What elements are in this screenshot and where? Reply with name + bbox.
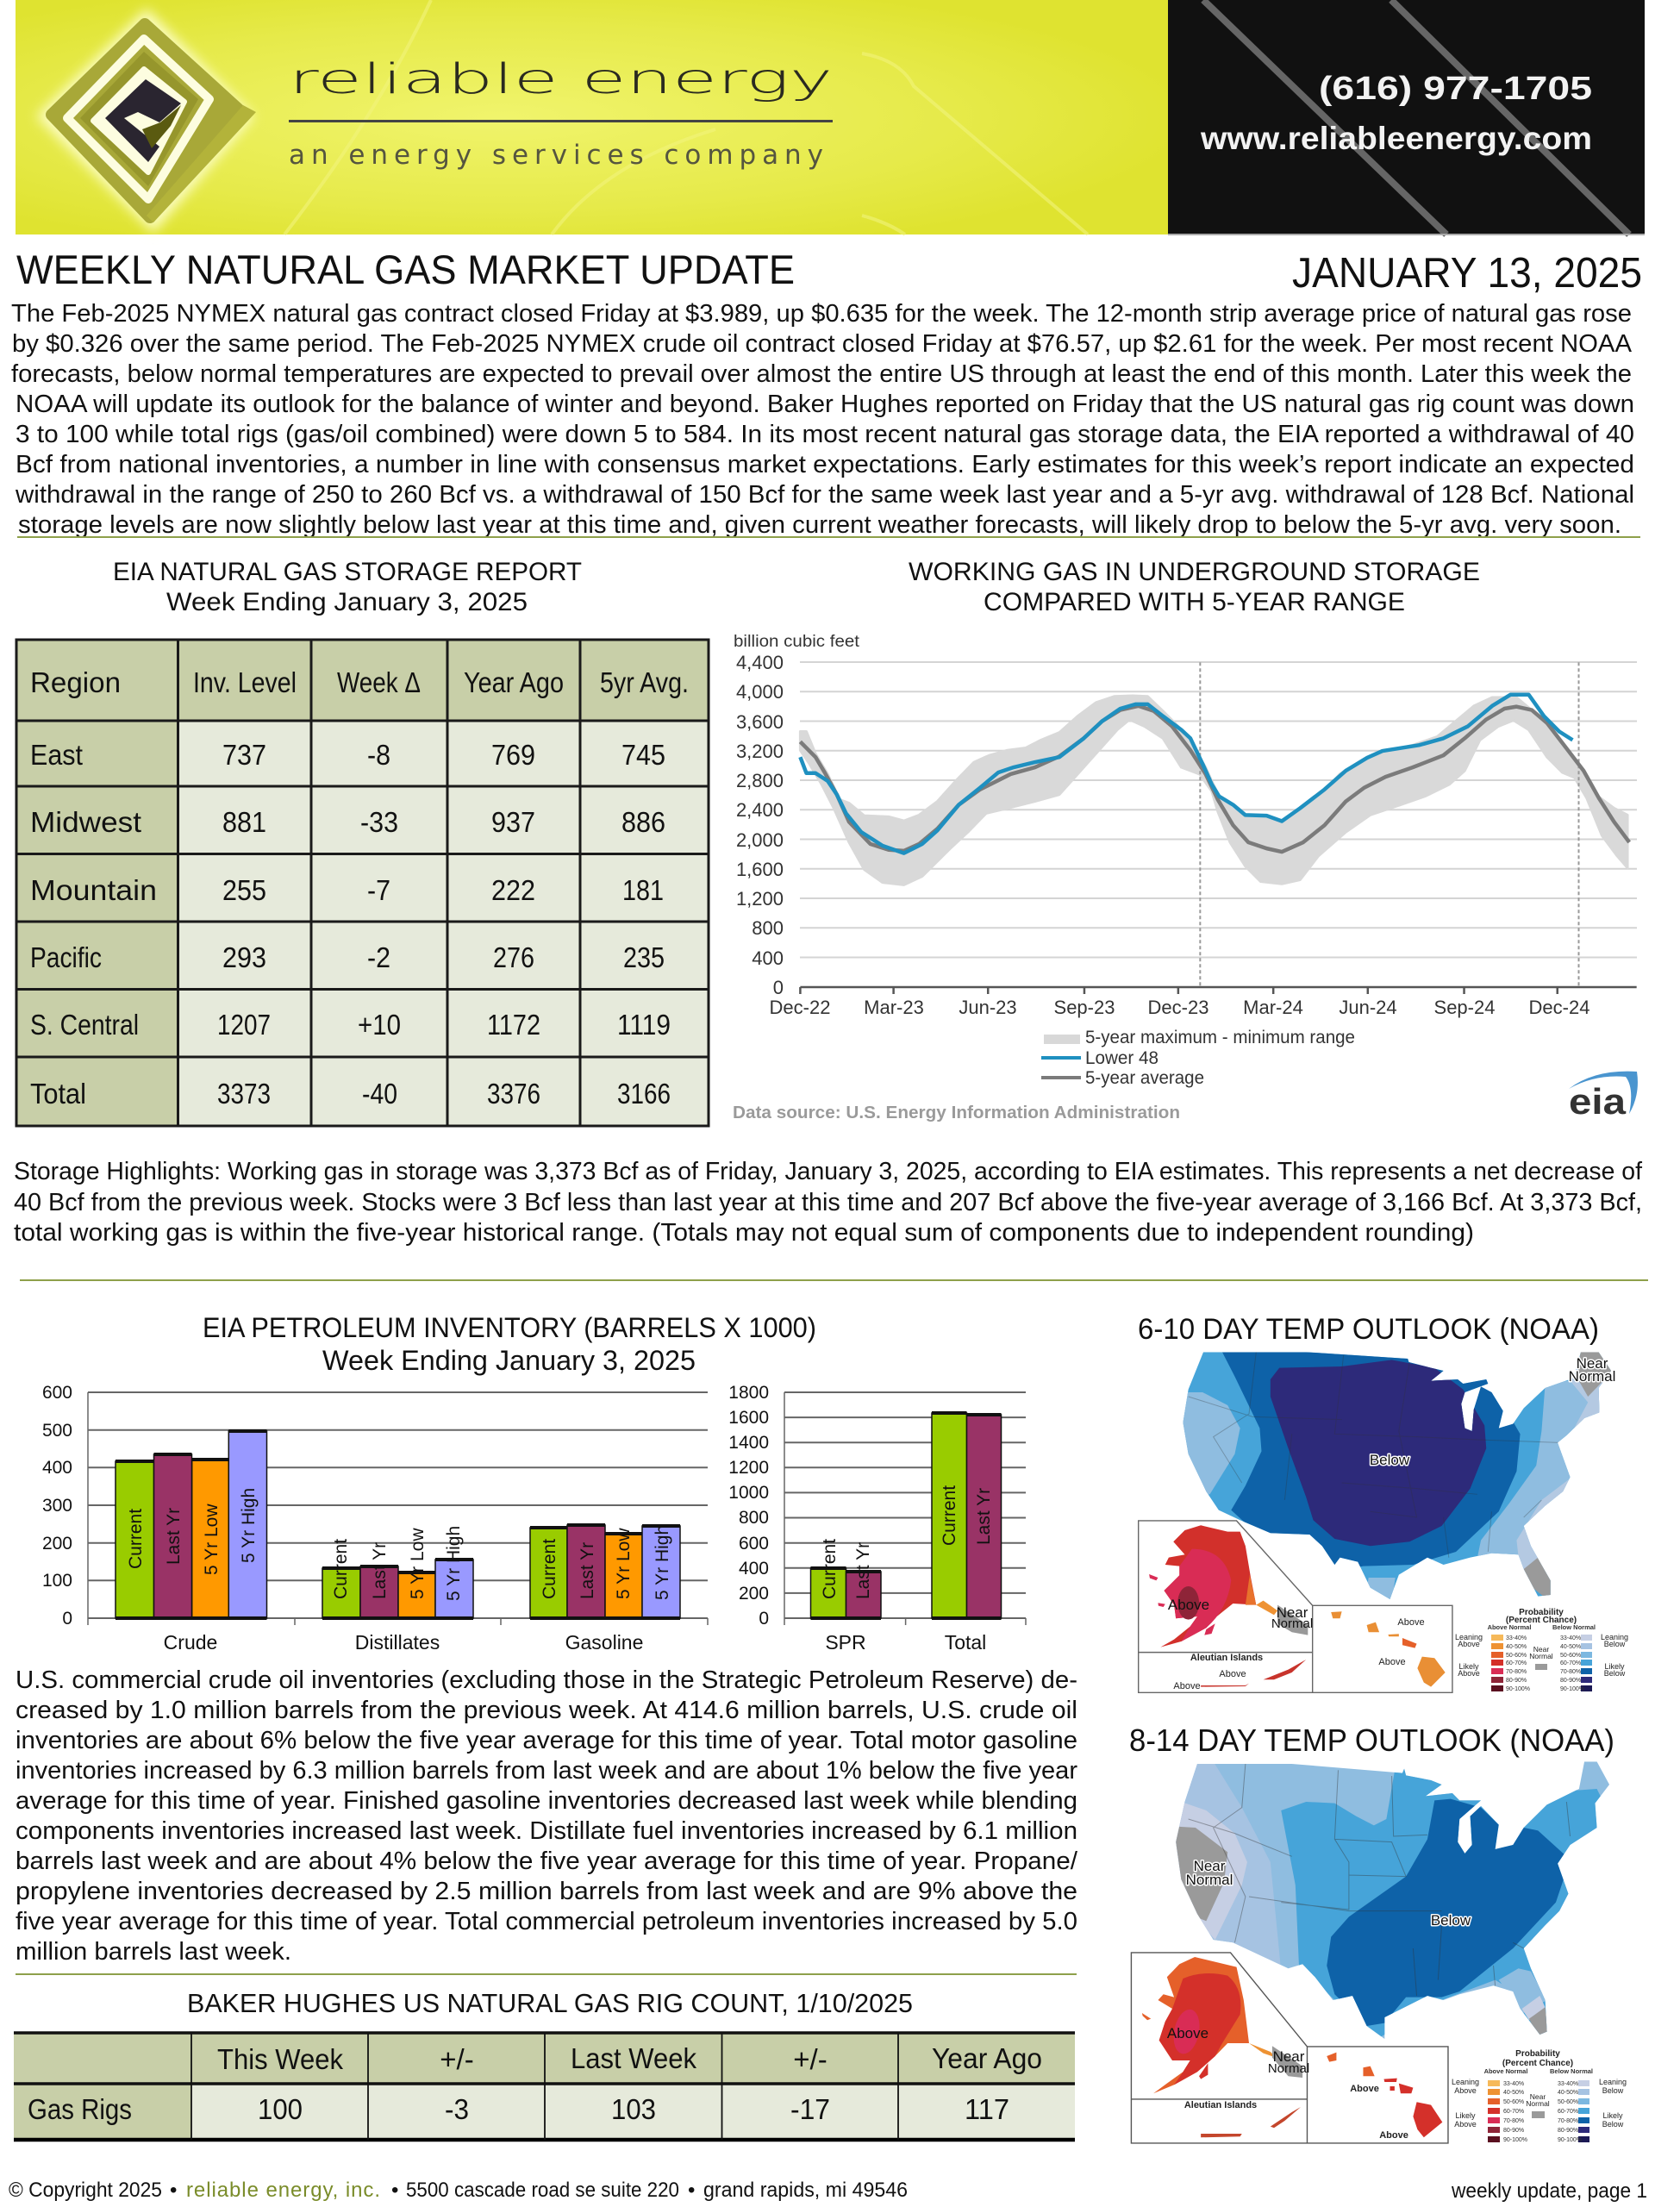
storage table [16,640,709,1126]
x axis labels: Mar-24 [1243,997,1303,1018]
petroleum inventory text: inventories are about 6% below the five year average for this time of year. Total motor gasoline [16,1727,1077,1754]
heading: storage report: EIA NATURAL GAS STORAGE REPORT [113,558,582,586]
rig table header [217,2042,1042,2075]
row: East [30,739,665,771]
rig table header: Last Week [571,2042,696,2074]
map legend: 50-60% [1503,2099,1524,2105]
chart unit label: billion cubic feet [734,633,860,651]
map legend: 70-80% [1503,2118,1524,2124]
map legend: 80-90% [1506,1678,1527,1684]
map legend: 33-40% [1558,2081,1578,2087]
heading: petroleum inventory: EIA PETROLEUM INVENTORY (BARRELS X 1000) [203,1312,816,1343]
map labels: Normal [1186,1872,1233,1888]
row: S. Central: 1172 [487,1009,540,1041]
bar labels: Current [540,1539,559,1599]
banner: yellow logo panel [16,0,1168,234]
bar labels: 5 Yr Low [408,1528,428,1599]
row: East: 737 [222,739,266,771]
storage highlights text: total working gas is within the five-year historical range. (Totals may not equal sum of components due to independent rounding) [14,1219,1474,1247]
map legend: Leaning [1601,1633,1628,1641]
map legend [1455,1608,1628,1692]
chart legend: 5-year average [1085,1068,1204,1088]
logo rule [289,120,833,122]
table header row: Year Ago [464,666,564,698]
y axis labels: 400 [739,1559,769,1579]
y axis labels: 1600 [728,1408,769,1428]
gasoline bars [530,1525,680,1618]
footer: company address: • [391,2179,398,2202]
petroleum bar chart: crude, distillates, gasoline [42,1383,708,1654]
map: 6-10 day temperature outlook [1139,1342,1628,1692]
Alaska inset frames [1139,1521,1452,1692]
table header row: Region [30,666,121,698]
footer: company address: 5500 cascade road se suite 220 [406,2179,679,2202]
row: Midwest: 881 [222,806,266,838]
x axis labels: Sep-24 [1434,997,1495,1018]
y axis labels: 0 [759,1609,769,1629]
map labels: Above [1350,2084,1379,2094]
map legend: Likely [1604,1662,1625,1671]
row: S. Central: 1207 [217,1009,271,1041]
map labels [1168,1355,1615,1691]
chart legend [1041,1028,1355,1088]
x axis labels: Jun-24 [1339,997,1397,1018]
footer: company address [9,2179,908,2202]
y axis labels: 3,600 [736,711,784,733]
footer: company address: grand rapids, mi 49546 [703,2179,908,2202]
Hawaii [1331,1611,1446,1687]
map legend: 40-50% [1558,2090,1578,2096]
petroleum inventory text: barrels last week and are about 4% below the five year average for this time of year. Propane/ [16,1848,1078,1875]
x axis [800,987,1637,994]
rig table values: Gas Rigs [28,2093,132,2125]
map legend: Near [1530,2092,1546,2101]
Alaska [1149,1525,1308,1647]
map legend: 33-40% [1503,2081,1524,2087]
petroleum inventory text [16,1666,1078,1966]
map legend: Above [1454,2120,1477,2129]
map legend: 40-50% [1503,2090,1524,2096]
y axis labels: 800 [739,1508,769,1528]
petroleum inventory text: U.S. commercial crude oil inventories (excluding those in the Strategic Petroleum Reserve) de- [16,1666,1077,1694]
row: Mountain: -7 [367,874,390,906]
SPR bars [810,1568,881,1618]
rig table values: 100 [258,2093,303,2125]
logo tagline: an energy services company [289,140,823,171]
map legend: 80-90% [1560,1678,1581,1684]
map labels: Above [1167,2025,1208,2041]
y axis labels: 1400 [728,1433,769,1453]
y axis labels: 800 [752,917,784,939]
rig table values: -17 [790,2093,830,2125]
row: Pacific [30,941,665,973]
row: East: 769 [491,739,535,771]
bar labels: Last Yr [164,1508,184,1565]
storage highlights text: Storage Highlights: Working gas in storage was 3,373 Bcf as of Friday, January 3, 2025, according to EIA estimates. This represents a net decrease of [14,1158,1643,1185]
x axis labels: Jun-23 [959,997,1017,1018]
map legend: Below Normal [1552,1623,1596,1631]
5-year average line [800,706,1629,852]
title: WEEKLY NATURAL GAS MARKET UPDATE [16,247,795,292]
map legend: (Percent Chance) [1506,1616,1577,1625]
row: Midwest: -33 [360,806,398,838]
footer: company address: © Copyright 2025 [9,2179,162,2202]
row: Midwest [30,806,665,838]
map legend: Above [1454,2086,1477,2095]
map legend: Above [1458,1640,1480,1648]
heading: storage report [113,558,582,616]
market summary text: Bcf from national inventories, a number in line with consensus market expectations. Early estimates for this week’s report indicate an expected [16,451,1634,478]
row: East: -8 [367,739,390,771]
row: Mountain: 255 [222,874,266,906]
heading: petroleum inventory: Week Ending January 3, 2025 [322,1345,696,1376]
map legend: 50-60% [1558,2099,1578,2105]
y axis labels: 1,600 [736,859,784,880]
row: Midwest: Midwest [30,806,141,838]
table header row: Inv. Level [193,666,297,698]
category labels: SPR [825,1631,866,1654]
table header row: 5yr Avg. [600,666,689,698]
date: JANUARY 13, 2025 [1292,250,1642,297]
row: S. Central: 1119 [617,1009,671,1041]
bar labels: Current [126,1509,146,1569]
map labels: Near [1577,1355,1608,1372]
map legend: Above Normal [1484,2067,1527,2075]
x axis labels: Mar-23 [864,997,924,1018]
market summary text: storage levels are now slightly below last year at this time and, given current weather forecasts, will likely drop to below the 5-yr avg. very soon. [18,511,1621,539]
category labels: Gasoline [565,1631,643,1654]
bar labels: Last Yr [853,1542,873,1599]
map legend: Likely [1602,2111,1623,2120]
row: Mountain: 222 [491,874,535,906]
y axis labels [736,652,784,998]
map labels: Near [1277,1604,1308,1621]
map legend: 80-90% [1503,2128,1524,2134]
heading: rig count: BAKER HUGHES US NATURAL GAS RIG COUNT, 1/10/2025 [187,1988,913,2018]
bar labels: Current [820,1539,840,1599]
y axis labels: 2,000 [736,829,784,851]
map legend: 60-70% [1506,1660,1527,1666]
map labels: Normal [1268,2061,1309,2076]
map labels: Above [1219,1669,1246,1679]
x axis labels [770,997,1589,1018]
bar labels: Last Yr [974,1488,994,1545]
row: Total: Total [30,1078,86,1110]
heading: 6-10 day outlook: 6-10 DAY TEMP OUTLOOK (NOAA) [1138,1313,1599,1346]
heading: working gas chart: COMPARED WITH 5-YEAR RANGE [984,588,1405,616]
map legend: 90-100% [1506,1686,1530,1692]
map labels: Aleutian Islands [1190,1653,1263,1663]
bar labels: Last Yr [370,1542,390,1599]
map legend: 60-70% [1558,2109,1578,2115]
market summary text: NOAA will update its outlook for the balance of winter and beyond. Baker Hughes reported on Friday that the US natural gas rig count was down [16,391,1634,418]
map legend: Below [1602,2120,1624,2129]
category labels [825,1631,986,1654]
map legend: 50-60% [1506,1653,1527,1659]
bar labels: Current [331,1539,351,1599]
map legend: (Percent Chance) [1502,2059,1573,2068]
petroleum inventory text: creased by 1.0 million barrels from the previous week. At 414.6 million barrels, U.S. crude oil [16,1697,1077,1724]
category labels: Total [945,1631,986,1654]
map labels: Near [1273,2048,1305,2065]
y axis labels: 300 [42,1496,72,1516]
dashed year markers [1200,662,1578,987]
map labels: Above [1379,2130,1408,2141]
map: 8-14 day temperature outlook [1131,1756,1627,2143]
map legend: Probability [1515,2049,1560,2059]
petroleum inventory text: million barrels last week. [16,1938,291,1966]
map labels: Above [1378,1657,1406,1667]
map legend: 33-40% [1506,1635,1527,1641]
row: Mountain: Mountain [30,874,157,906]
market summary text: forecasts, below normal temperatures are expected to prevail over almost the entire US through at least the end of this month. Later this week the [11,360,1632,388]
row: Pacific: 293 [222,941,266,973]
rig table header: +/- [440,2043,474,2075]
row: Mountain: 181 [622,874,664,906]
bar labels: 5 Yr High [653,1525,672,1600]
row: S. Central: +10 [358,1009,401,1041]
x axis labels: Sep-23 [1054,997,1115,1018]
map legend: 50-60% [1560,1653,1581,1659]
y axis labels: 4,400 [736,652,784,673]
heading: working gas chart [909,558,1480,616]
map labels: Below [1431,1912,1471,1929]
storage highlights text [14,1158,1643,1247]
map legend: 90-100% [1558,2137,1582,2143]
heading: storage report: Week Ending January 3, 2025 [166,588,528,616]
petroleum inventory text: propylene inventories decreased by 2.5 million barrels from last week and are 9% above the [16,1878,1077,1905]
y axis labels: 200 [42,1534,72,1554]
row: Total: -40 [362,1078,397,1110]
y axis labels: 100 [42,1571,72,1591]
y axis labels: 4,000 [736,681,784,703]
map legend: 60-70% [1503,2109,1524,2115]
bar labels: 5 Yr High [444,1526,464,1601]
table header row [30,666,689,698]
map labels: Above [1397,1617,1425,1628]
map legend: Leaning [1599,2078,1627,2086]
chart legend: 5-year maximum - minimum range [1085,1028,1355,1047]
map legend: 90-100% [1503,2137,1527,2143]
market summary text: by $0.326 over the same period. The Feb-2025 NYMEX crude oil contract closed Friday at $76.57, up $2.61 for the week. Per most recent NOAA [12,330,1633,358]
market summary text [11,300,1634,539]
map legend: 70-80% [1558,2118,1578,2124]
map legend: 33-40% [1560,1635,1581,1641]
heading: 8-14 day outlook: 8-14 DAY TEMP OUTLOOK (NOAA) [1129,1722,1614,1758]
heading: working gas chart: WORKING GAS IN UNDERGROUND STORAGE [909,558,1480,586]
map labels: Above [1173,1681,1201,1691]
y axis labels: 2,800 [736,770,784,791]
rig table values: 103 [611,2093,656,2125]
map legend: Above Normal [1488,1623,1531,1631]
y axis labels: 1,200 [736,888,784,910]
y axis labels: 1200 [728,1458,769,1478]
rig table values: -3 [445,2093,469,2125]
y axis labels: 1000 [728,1483,769,1503]
category labels [164,1631,643,1654]
row: Pacific: Pacific [30,941,102,973]
map legend: 70-80% [1506,1669,1527,1675]
crude bars [116,1431,267,1618]
rig count table [14,2033,1075,2140]
banner light streaks [284,0,1088,234]
rig table header: +/- [793,2043,828,2075]
row: Total: 3373 [217,1078,271,1110]
row: Pacific: 235 [623,941,665,973]
chart legend: Lower 48 [1085,1048,1159,1068]
row: Total [30,1078,671,1110]
x axis labels: Dec-23 [1148,997,1208,1018]
row: East: 745 [621,739,665,771]
row: Total: 3376 [487,1078,540,1110]
map labels: Normal [1271,1616,1313,1631]
logo: diamond mark [36,9,256,233]
Aleutian islands [1201,2107,1301,2137]
working gas line chart [733,633,1638,1122]
Alaska inset frames [1131,1953,1448,2143]
bar labels: 5 Yr High [239,1488,259,1563]
footer: company address: • [688,2179,695,2202]
bar labels [126,1488,672,1601]
map labels: Aleutian Islands [1184,2100,1257,2110]
icon: eia logo [1569,1072,1638,1122]
Hawaii [1327,2053,1375,2076]
map legend: Normal [1526,2099,1550,2108]
category labels: Distillates [355,1631,440,1654]
logo wordmark: reliable energy [289,55,833,103]
x axis labels: Dec-24 [1529,997,1589,1018]
row: S. Central: S. Central [30,1009,139,1041]
bar labels: 5 Yr Low [614,1528,634,1599]
y axis labels: 200 [739,1584,769,1604]
map legend: Above [1458,1669,1480,1678]
5-year range band [800,696,1627,885]
data source note: Data source: U.S. Energy Information Administration [733,1104,1180,1122]
petroleum inventory text: five year average for this time of year. Total commercial petroleum inventories increased by 5.0 [16,1908,1077,1935]
map legend: 60-70% [1560,1660,1581,1666]
map legend: Leaning [1452,2078,1479,2086]
bar labels: 5 Yr Low [202,1504,222,1575]
map labels: Above [1168,1597,1209,1613]
row: Midwest: 886 [621,806,665,838]
map legend: Near [1533,1645,1549,1654]
Lower 48 line [800,695,1572,853]
map legend: Below Normal [1550,2067,1593,2075]
website: www.reliableenergy.com [1200,121,1592,156]
market summary text: withdrawal in the range of 250 to 260 Bcf vs. a withdrawal of 150 Bcf for the same week last year and a 5-yr avg. withdrawal of 128 Bcf. National [15,481,1634,509]
footer: company address: reliable energy, inc. [186,2179,380,2202]
map legend: Below [1604,1669,1626,1678]
y axis labels: 1800 [728,1383,769,1403]
map legend: 90-100% [1560,1686,1584,1692]
rig table header: Year Ago [932,2042,1042,2074]
market summary text: The Feb-2025 NYMEX natural gas contract closed Friday at $3.989, up $0.635 for the week. The 12-month strip average price of natural gas rose [11,300,1632,328]
rig table header: This Week [217,2043,343,2075]
row: Total: 3166 [617,1078,671,1110]
row: East: East [30,739,83,771]
y axis labels: 0 [62,1609,72,1629]
US zones [1183,1352,1611,1599]
heading: petroleum inventory [203,1312,816,1376]
bar labels [820,1485,994,1599]
header banner [16,0,1645,235]
category labels: Crude [164,1631,217,1654]
rig table values: 117 [965,2093,1009,2125]
y axis labels: 2,400 [736,799,784,821]
US zones [1176,1762,1609,2039]
market summary text: 3 to 100 while total rigs (gas/oil combined) were down 5 to 584. In its most recent natural gas storage data, the EIA reported a withdrawal of 40 [16,421,1634,448]
map legend: 40-50% [1560,1644,1581,1650]
map legend: Likely [1455,2111,1476,2120]
map legend [1452,2049,1627,2143]
rig table values [28,2093,1009,2125]
map labels: Near [1194,1858,1226,1874]
map legend: Leaning [1455,1633,1483,1641]
petroleum bar chart: SPR and total [728,1383,1026,1654]
map legend: Below [1602,2086,1624,2095]
bar labels: Last Yr [578,1542,597,1599]
petroleum inventory text: average for this time of year. Finished gasoline inventories decreased last week while blending [16,1787,1077,1815]
x axis labels: Dec-22 [770,997,830,1018]
footer: page number: weekly update, page 1 [1451,2179,1647,2203]
row: S. Central [30,1009,671,1041]
distillates bars [322,1560,473,1618]
y axis labels: 400 [752,947,784,969]
map labels [1167,1858,1471,2141]
row: Midwest: 937 [491,806,535,838]
y axis labels [42,1383,72,1629]
Aleutian islands [1201,1660,1306,1687]
map legend: 40-50% [1506,1644,1527,1650]
petroleum inventory text: inventories increased by 6.3 million barrels from last week and are about 1% below the five year [16,1757,1077,1785]
map labels: Normal [1569,1368,1615,1385]
phone number: (616) 977-1705 [1319,71,1592,107]
map legend: 70-80% [1560,1669,1581,1675]
row: Pacific: 276 [493,941,534,973]
total bars [932,1413,1002,1618]
map legend: Probability [1519,1608,1564,1617]
row: Mountain [30,874,664,906]
footer: company address: • [170,2179,177,2202]
y axis labels: 600 [739,1534,769,1554]
row: Pacific: -2 [367,941,390,973]
icon: eia logo: eia [1569,1081,1627,1122]
y axis labels [728,1383,769,1629]
y axis labels: 0 [773,977,784,998]
petroleum inventory text: components inventories increased last week. Distillate fuel inventories increased by 6.1 million [16,1817,1077,1845]
map labels: Below [1370,1452,1410,1468]
y axis labels: 600 [42,1383,72,1403]
y axis labels: 500 [42,1421,72,1441]
bar labels: Current [940,1485,959,1546]
map legend: Below [1604,1640,1626,1648]
y axis labels: 400 [42,1458,72,1478]
Alaska [1142,1957,1302,2093]
y axis labels: 3,200 [736,741,784,762]
table header row: Week Δ [337,666,421,698]
banner: black contact panel [1168,0,1645,235]
map legend: Likely [1458,1662,1479,1671]
map legend: Normal [1529,1652,1553,1660]
storage highlights text: 40 Bcf from the previous week. Stocks were 3 Bcf less than last year at this time and 207 Bcf above the five-year average of 3,166 Bcf. At 3,373 Bcf, [14,1189,1642,1216]
map legend: 80-90% [1558,2128,1578,2134]
